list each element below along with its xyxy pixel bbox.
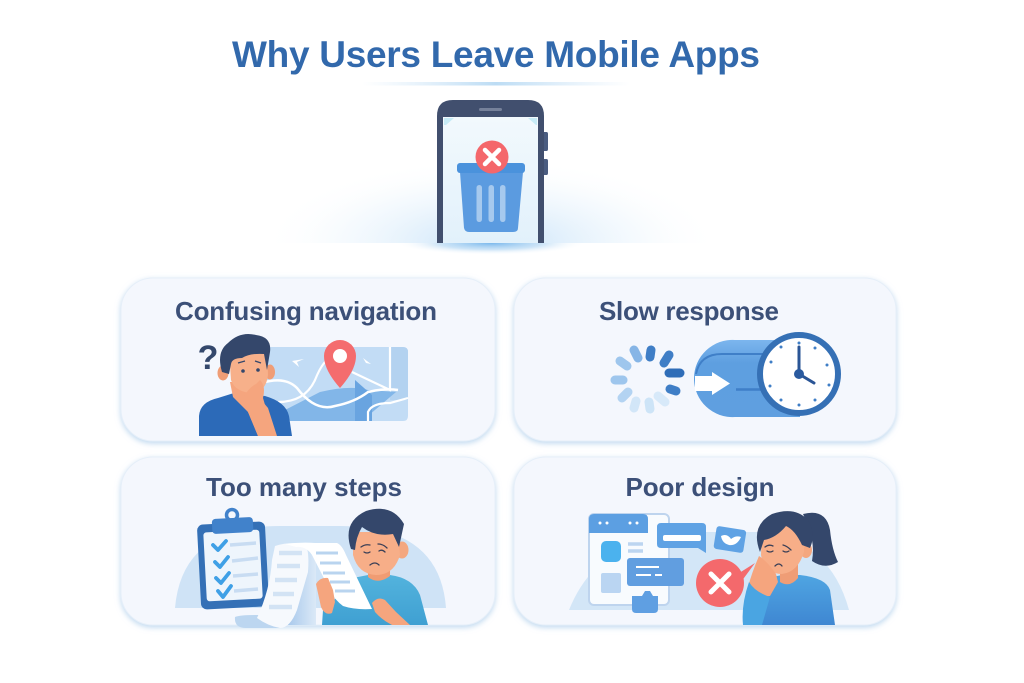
panel card xyxy=(121,278,495,441)
phone side buttons xyxy=(544,132,548,175)
heading: Confusing navigation xyxy=(175,296,437,326)
icon: trash can xyxy=(457,163,525,232)
confused man xyxy=(199,334,292,436)
title: Why Users Leave Mobile Apps xyxy=(232,34,760,75)
panel: poor design xyxy=(514,457,896,625)
icon: clipboard checklist xyxy=(197,510,269,610)
icon: heart card xyxy=(713,526,747,553)
panel card xyxy=(121,457,495,625)
heading: Slow response xyxy=(599,296,779,326)
hero: phone with trash xyxy=(338,100,644,253)
phone speaker xyxy=(479,108,502,111)
icon: loading spinner xyxy=(615,350,680,409)
icon: arrow xyxy=(695,372,730,395)
phone body xyxy=(437,100,544,243)
panel card xyxy=(514,457,896,625)
icon: red x badge xyxy=(696,559,755,607)
speech bubble xyxy=(657,523,706,553)
map illustration xyxy=(262,347,408,421)
panel: too many steps xyxy=(121,457,495,628)
message card xyxy=(627,558,684,586)
frustrated boy xyxy=(322,509,428,625)
browser window xyxy=(589,514,669,605)
sad woman xyxy=(743,511,838,625)
icon: map pin xyxy=(324,340,356,388)
speed pill xyxy=(694,340,800,417)
icon: question mark: ? xyxy=(198,339,218,377)
panel: slow response xyxy=(514,278,896,441)
glow behind phone xyxy=(338,190,644,243)
glow under phone xyxy=(413,243,568,253)
title underline xyxy=(362,82,630,86)
background arch xyxy=(175,526,446,608)
folder icon xyxy=(632,591,658,613)
panel: confusing navigation xyxy=(121,278,495,441)
panel card xyxy=(514,278,896,441)
heading: Poor design xyxy=(626,472,774,502)
boy hands xyxy=(316,578,410,625)
icon: red x badge xyxy=(476,140,508,174)
screen corner marks xyxy=(444,118,537,125)
background arch xyxy=(569,532,849,610)
heading: Too many steps xyxy=(206,472,402,502)
phone screen xyxy=(443,117,538,243)
paper scroll xyxy=(235,543,372,628)
icon: clock xyxy=(760,335,838,413)
